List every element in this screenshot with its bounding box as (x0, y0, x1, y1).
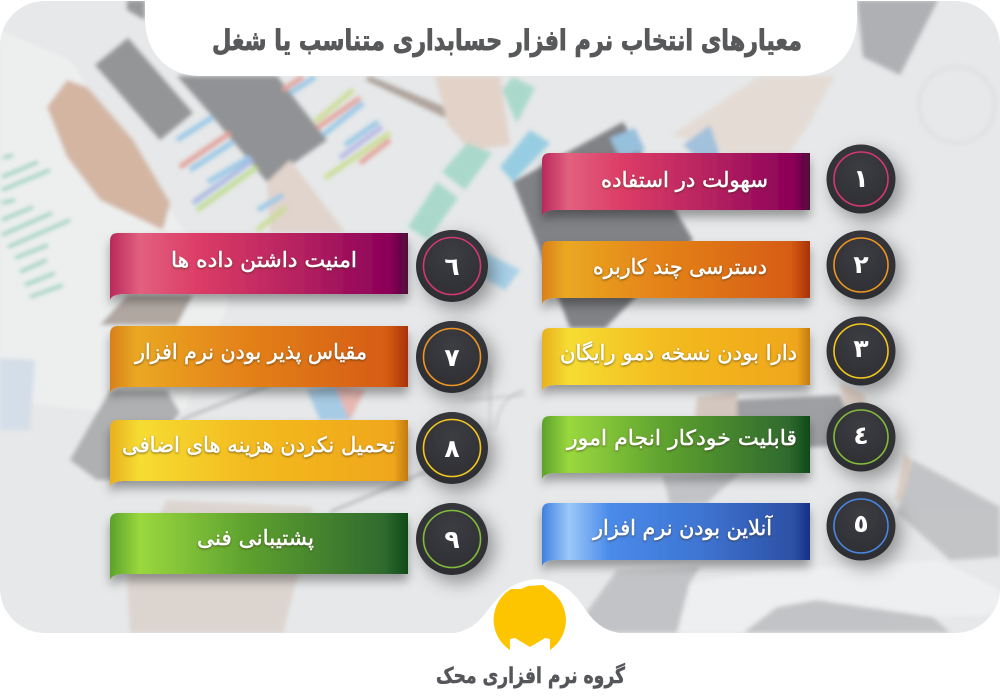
number badge 1: ۱ (853, 164, 869, 193)
ribbon 4: قابلیت خودکار انجام امور (566, 426, 797, 450)
ribbon 2 (542, 241, 810, 304)
logo wordmark: گروه نرم افزاری محک (436, 662, 625, 689)
ribbon 8: تحمیل نکردن هزینه های اضافی (122, 433, 395, 457)
number badge 7 (416, 321, 488, 393)
photo: hand on the right (672, 76, 835, 180)
photo: forearm under ribbon six (100, 295, 193, 325)
ribbon 6: امنیت داشتن داده ها (171, 248, 357, 272)
ribbon 5: آنلاین بودن نرم افزار (592, 515, 773, 540)
number badge 2: ۲ (853, 250, 869, 279)
ribbon 9 (110, 513, 408, 580)
photo: smartphone (95, 38, 193, 140)
ribbon 4 (542, 416, 810, 479)
photo: stamp circle (919, 67, 995, 143)
number badge 3 (826, 316, 896, 386)
number badge 5 (826, 492, 896, 560)
ribbon 7: مقیاس پذیر بودن نرم افزار (134, 340, 367, 364)
ribbon 2: دسترسی چند کاربره (593, 255, 767, 279)
ribbon 6 (110, 233, 408, 300)
number badge 1 (826, 144, 896, 214)
ribbon 1 (542, 153, 810, 216)
photo: graph sketch (465, 365, 525, 430)
photo: calculator (513, 122, 693, 328)
ribbon 8 (110, 420, 408, 487)
logo mark (494, 585, 566, 650)
ribbon 3: دارا بودن نسخه دمو رایگان (560, 341, 797, 365)
ribbon 7 (110, 326, 408, 393)
number badge 3: ۳ (853, 334, 869, 363)
photo: knit sleeves (897, 460, 1000, 560)
number badge 4: ٤ (853, 421, 869, 450)
number badge 2 (826, 230, 896, 300)
photo: lower-right tablet (733, 395, 860, 450)
number badge 6: ٦ (444, 252, 460, 281)
photo: central bar charts (177, 77, 390, 230)
number badge 4 (826, 402, 896, 472)
photo: green column chart (2, 155, 70, 297)
ribbon 3 (542, 328, 810, 391)
photo: left hand (47, 80, 170, 230)
number badge 5: ٥ (853, 509, 869, 538)
number badge 7: ۷ (444, 343, 460, 372)
photo: forearm (267, 160, 345, 232)
title tab (145, 0, 857, 76)
number badge 8 (416, 412, 488, 484)
photo: lower-left tablet (70, 390, 180, 480)
photo: dark sleeve (177, 76, 327, 182)
number badge 9: ۹ (444, 525, 460, 554)
photo: grey sleeve top right (857, 0, 938, 75)
photo: lower-centre hand (127, 500, 313, 633)
ribbon 1: سهولت در استفاده (601, 168, 768, 192)
photo: ruler and right-top hand (365, 76, 510, 145)
title: معیارهای انتخاب نرم افزار حسابداری متناسب یا شغل (212, 24, 802, 57)
photo: white sleeve and paper (1, 78, 191, 408)
number badge 6 (416, 230, 488, 302)
ribbon 9: پشتیبانی فنی (197, 526, 314, 550)
ribbon 5 (542, 503, 810, 566)
number badge 9 (416, 503, 488, 575)
logo bump (445, 579, 630, 634)
photo: green and blue cards (408, 182, 458, 240)
number badge 8: ۸ (444, 434, 460, 463)
